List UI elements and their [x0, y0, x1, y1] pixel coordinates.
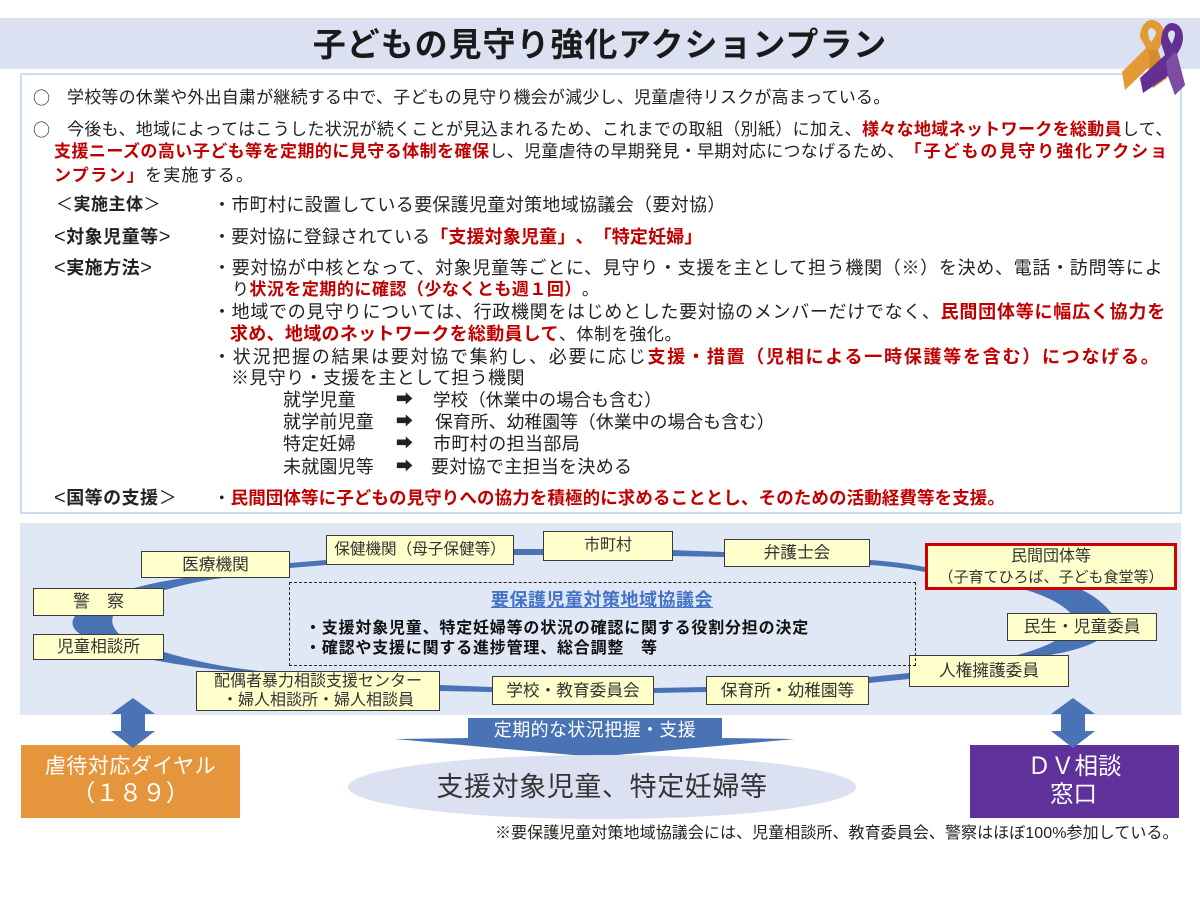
callout: abuse dial — [21, 745, 240, 818]
text block: note on lead organisations: ➡ — [396, 390, 413, 409]
text: council roles — [305, 619, 809, 657]
label: national support: <国等の支援＞ — [54, 487, 177, 509]
text block: implementation method detail: ・状況把握の結果は要対協で集約し、必要に応じ支援・措置（児相による一時保護等を含む）につなげる。 — [213, 347, 1160, 367]
text block: note on lead organisations: ➡ — [396, 434, 413, 453]
text block: note on lead organisations: 就学児童 — [283, 390, 356, 410]
box: health agencies: 保健機関（母子保健等） — [334, 541, 506, 558]
callout: DV consultation: 窓口 — [1050, 781, 1097, 807]
title band — [0, 18, 1200, 69]
label: target children: <対象児童等> — [54, 226, 171, 248]
box: human rights commissioners — [909, 655, 1069, 687]
callout: DV consultation — [970, 745, 1179, 818]
box: schools and education board: 学校・教育委員会 — [506, 680, 640, 700]
text block: note on lead organisations: 要対協で主担当を決める — [431, 457, 632, 477]
box: municipality: 市町村 — [584, 537, 632, 554]
box: police — [33, 588, 164, 616]
text block: note on lead organisations — [231, 368, 775, 477]
box: municipality — [543, 531, 673, 561]
icon: orange and purple ribbons — [1122, 20, 1185, 95]
text block: background paragraph 2: ○ — [33, 116, 50, 141]
text block: background paragraph 2: 支援ニーズの高い子ども等を定期的に見守る体制を確保し、児童虐待の早期発見・早期対応につなげるため、「子どもの見守り強化アクショ — [54, 142, 1169, 161]
text block: note on lead organisations: 保育所、幼稚園等（休業中の場合も含む） — [435, 412, 775, 432]
ellipse: target children — [348, 755, 856, 819]
box: private organisations (highlighted): （子育てひろば、子ども食堂等） — [938, 568, 1164, 586]
ellipse: target children: 支援対象児童、特定妊婦等 — [436, 772, 768, 802]
box: human rights commissioners: 人権擁護委員 — [939, 661, 1039, 680]
box: medical institutions: 医療機関 — [182, 554, 249, 574]
box: spousal violence support centre: ・婦人相談所・婦人相談員 — [222, 692, 414, 709]
text: national support detail: ・民間団体等に子どもの見守りへの協力を積極的に求めることとし、そのための活動経費等を支援。 — [213, 488, 1005, 508]
text block: background paragraph 2: ンプラン」を実施する。 — [54, 166, 254, 185]
text block: background paragraph 2 — [33, 116, 1173, 185]
panel: action plan overview — [20, 73, 1182, 514]
box: health agencies — [326, 535, 514, 565]
text block: note on lead organisations: ➡ — [396, 457, 413, 476]
box: child guidance centre — [33, 634, 164, 660]
text: 学校等の休業や外出自粛が継続する中で、子どもの見守り機会が減少し、児童虐待リスクが高まっている。 — [67, 88, 890, 107]
text block: implementation method detail: 求め、地域のネットワークを総動員して、体制を強化。 — [230, 324, 682, 344]
text block: note on lead organisations: ➡ — [396, 412, 413, 431]
box: spousal violence support centre — [196, 671, 440, 711]
panel: regional council — [289, 582, 916, 666]
text block: implementation method detail: り状況を定期的に確認（少なくとも週１回）。 — [232, 280, 599, 299]
callout: DV consultation: ＤＶ相談 — [1028, 753, 1122, 779]
box: nursery and kindergarten — [706, 676, 869, 705]
box: bar association — [724, 539, 870, 567]
box: private organisations (highlighted): 民間団体等 — [1011, 548, 1091, 564]
text block: background paragraph 1: ○ — [33, 84, 50, 109]
text block: note on lead organisations: 特定妊婦 — [283, 434, 356, 454]
box: welfare and child commissioners: 民生・児童委員 — [1024, 617, 1140, 636]
box: spousal violence support centre: 配偶者暴力相談支援センター — [214, 673, 422, 690]
box: bar association: 弁護士会 — [764, 543, 830, 562]
text block: note on lead organisations: ※見守り・支援を主として担う機関 — [231, 368, 525, 388]
callout: abuse dial: 虐待対応ダイヤル — [45, 755, 216, 778]
box: private organisations (highlighted) — [925, 543, 1177, 590]
panel: network diagram background — [20, 523, 1181, 715]
text: council roles: ・確認や支援に関する進捗管理、総合調整 等 — [305, 640, 658, 657]
box: medical institutions — [141, 551, 290, 578]
label: implementation method: <実施方法> — [54, 257, 152, 279]
label: implementing body: ＜実施主体＞ — [56, 195, 161, 214]
text block: note on lead organisations: 学校（休業中の場合も含む） — [433, 390, 662, 410]
text block: note on lead organisations: 未就園児等 — [283, 457, 374, 477]
box: welfare and child commissioners — [1007, 613, 1157, 641]
text block: background paragraph 2: 今後も、地域によってはこうした状況が続くことが見込まれるため、これまでの取組（別紙）に加え、様々な地域ネットワークを総動員して、 — [67, 120, 1173, 139]
text block: implementation method detail: ・地域での見守りについては、行政機関をはじめとした要対協のメンバーだけでなく、民間団体等に幅広く協力を — [213, 302, 1166, 322]
box: police: 警 察 — [73, 592, 124, 611]
box: child guidance centre: 児童相談所 — [57, 637, 140, 656]
text: target children detail: ・要対協に登録されている「支援対象児童」、「特定妊婦」 — [213, 227, 703, 247]
text: regular monitoring label: 定期的な状況把握・支援 — [494, 720, 696, 740]
text block: note on lead organisations: 就学前児童 — [283, 412, 374, 432]
footnote: ※要保護児童対策地域協議会には、児童相談所、教育委員会、警察はほぼ100%参加している。 — [495, 825, 1179, 842]
text block: implementation method detail — [213, 258, 1166, 367]
text block: background paragraph 1 — [33, 84, 890, 109]
callout: abuse dial: （１８９） — [72, 780, 189, 806]
box: nursery and kindergarten: 保育所・幼稚園等 — [721, 680, 854, 700]
title: 子どもの見守り強化アクションプラン — [313, 26, 887, 63]
text: council roles: ・支援対象児童、特定妊婦等の状況の確認に関する役割分担の決定 — [305, 620, 809, 637]
text block: implementation method detail: ・要対協が中核となって、対象児童等ごとに、見守り・支援を主として担う機関（※）を決め、電話・訪問等によ — [213, 258, 1163, 278]
box: schools and education board — [492, 676, 654, 705]
text block: note on lead organisations: 市町村の担当部局 — [433, 434, 580, 454]
heading: regional council: 要保護児童対策地域協議会 — [491, 590, 713, 610]
text: implementing body detail: ・市町村に設置している要保護児童対策地域協議会（要対協） — [213, 195, 726, 215]
